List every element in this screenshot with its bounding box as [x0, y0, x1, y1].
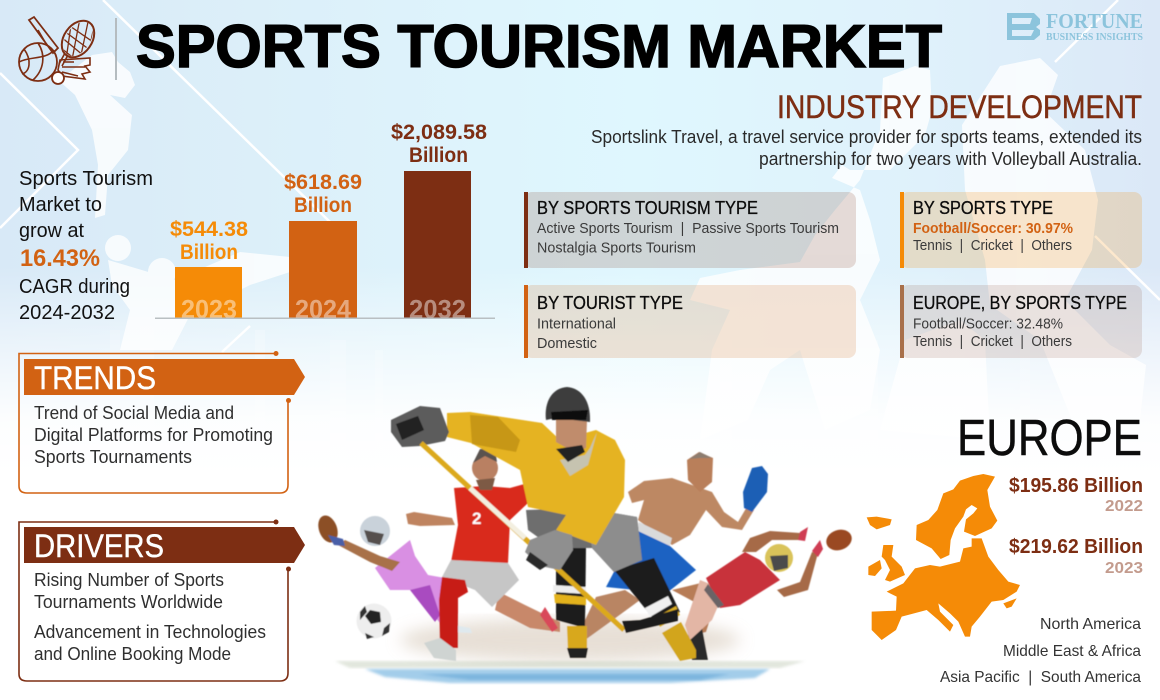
- panel: by sports tourism type: Active Sports Tourism | Passive Sports Tourism: [537, 220, 839, 237]
- athlete: hockey player: [391, 387, 696, 661]
- illustration: athletes: [315, 387, 854, 683]
- stat: Europe 2022: [1009, 475, 1143, 515]
- banner: drivers: DRIVERS: [34, 528, 164, 564]
- athlete: red football player: [685, 526, 854, 640]
- panel: trends: Sports Tournaments: [34, 447, 192, 467]
- bar: 2032: 2032: [409, 294, 466, 324]
- soccer ball: [356, 604, 392, 639]
- stat: Europe 2023: [1009, 536, 1143, 577]
- text: CAGR callout: CAGR during: [19, 276, 130, 298]
- stat: Europe 2023: 2023: [1105, 560, 1143, 577]
- panel: by sports type: Football/Soccer: 30.97%: [913, 220, 1073, 237]
- text: other regions: [940, 616, 1141, 686]
- bar: 2032: Billion: [409, 144, 468, 167]
- panel: by tourist type: BY TOURIST TYPE: [537, 293, 683, 313]
- icon: sports equipment: [19, 15, 101, 84]
- panel: by sports type: BY SPORTS TYPE: [913, 198, 1053, 218]
- athlete: boxer: [578, 452, 768, 660]
- text: industry development body: [591, 127, 1142, 169]
- panel: Europe by sports type: Tennis | Cricket | Others: [913, 333, 1072, 350]
- text: other regions: Middle East & Africa: [1003, 643, 1141, 660]
- bar: 2023: [170, 218, 248, 324]
- panel: drivers: Tournaments Worldwide: [34, 592, 223, 612]
- bar: 2024: $618.69: [284, 171, 362, 194]
- bar: 2032: [391, 121, 487, 324]
- panel: trends: [19, 351, 305, 493]
- bar: 2024: 2024: [295, 294, 352, 324]
- panel: by tourist type: Domestic: [537, 335, 597, 352]
- panel: by sports tourism type: [524, 192, 856, 268]
- stat: Europe 2023: $219.62 Billion: [1009, 536, 1143, 558]
- bar: 2032: $2,089.58: [391, 121, 487, 144]
- text: CAGR callout: grow at: [19, 220, 84, 242]
- bar chart: [155, 121, 495, 324]
- text: CAGR callout: 16.43%: [20, 245, 100, 272]
- ground and dust: [335, 618, 805, 683]
- map: Europe: [867, 474, 1020, 640]
- logo: Fortune Business Insights: BUSINESS INSIGHTS: [1046, 32, 1143, 43]
- text: industry development body: Sportslink Travel, a travel service provider for sports teams, extended its: [591, 127, 1142, 147]
- panel: Europe by sports type: [900, 285, 1142, 358]
- text: CAGR callout: [19, 168, 153, 324]
- text: CAGR callout: Market to: [19, 194, 102, 216]
- panel: drivers: Advancement in Technologies: [34, 622, 266, 642]
- panel: by tourist type: International: [537, 316, 616, 332]
- panel: drivers: and Online Booking Mode: [34, 644, 231, 664]
- text: CAGR callout: 2024-2032: [19, 302, 115, 324]
- panel: by sports tourism type: BY SPORTS TOURISM TYPE: [537, 198, 758, 218]
- divider: [115, 18, 117, 80]
- panel: by sports type: Tennis | Cricket | Others: [913, 237, 1072, 254]
- athlete: soccer player: 2: [472, 509, 481, 528]
- stat: Europe 2022: $195.86 Billion: [1009, 475, 1143, 497]
- text: other regions: Asia Pacific | South America: [940, 669, 1141, 686]
- bar: 2024: Billion: [294, 194, 352, 217]
- panel: trends: Trend of Social Media and: [34, 403, 234, 423]
- logo: Fortune Business Insights: [1007, 9, 1143, 43]
- panel: drivers: Rising Number of Sports: [34, 570, 224, 590]
- bar: 2023: $544.38: [170, 218, 248, 241]
- logo: Fortune Business Insights: FORTUNE: [1046, 9, 1143, 33]
- panel: drivers: [19, 520, 305, 681]
- panel: by sports type: [900, 192, 1142, 268]
- panel: trends: Digital Platforms for Promoting: [34, 425, 273, 445]
- text: other regions: North America: [1040, 616, 1141, 633]
- athlete: soccer player: [406, 449, 560, 661]
- panel: by sports tourism type: Nostalgia Sports Tourism: [537, 240, 696, 256]
- stat: Europe 2022: 2022: [1105, 498, 1143, 515]
- title: SPORTS TOURISM MARKET: [136, 13, 942, 80]
- panel: Europe by sports type: Football/Soccer: 32.48%: [913, 316, 1063, 332]
- banner: drivers: [24, 527, 305, 564]
- text: industry development body: partnership for two years with Volleyball Australia.: [759, 149, 1142, 169]
- bar: 2024: [284, 171, 362, 324]
- panel: Europe by sports type: EUROPE, BY SPORTS TYPE: [913, 293, 1127, 313]
- bar: 2023: 2023: [181, 294, 237, 324]
- bar: 2023: Billion: [180, 241, 238, 264]
- banner: trends: [24, 359, 305, 396]
- athlete: purple football player: [315, 513, 472, 633]
- text: CAGR callout: Sports Tourism: [19, 168, 153, 190]
- panel: by tourist type: [524, 285, 856, 358]
- banner: trends: TRENDS: [34, 360, 156, 396]
